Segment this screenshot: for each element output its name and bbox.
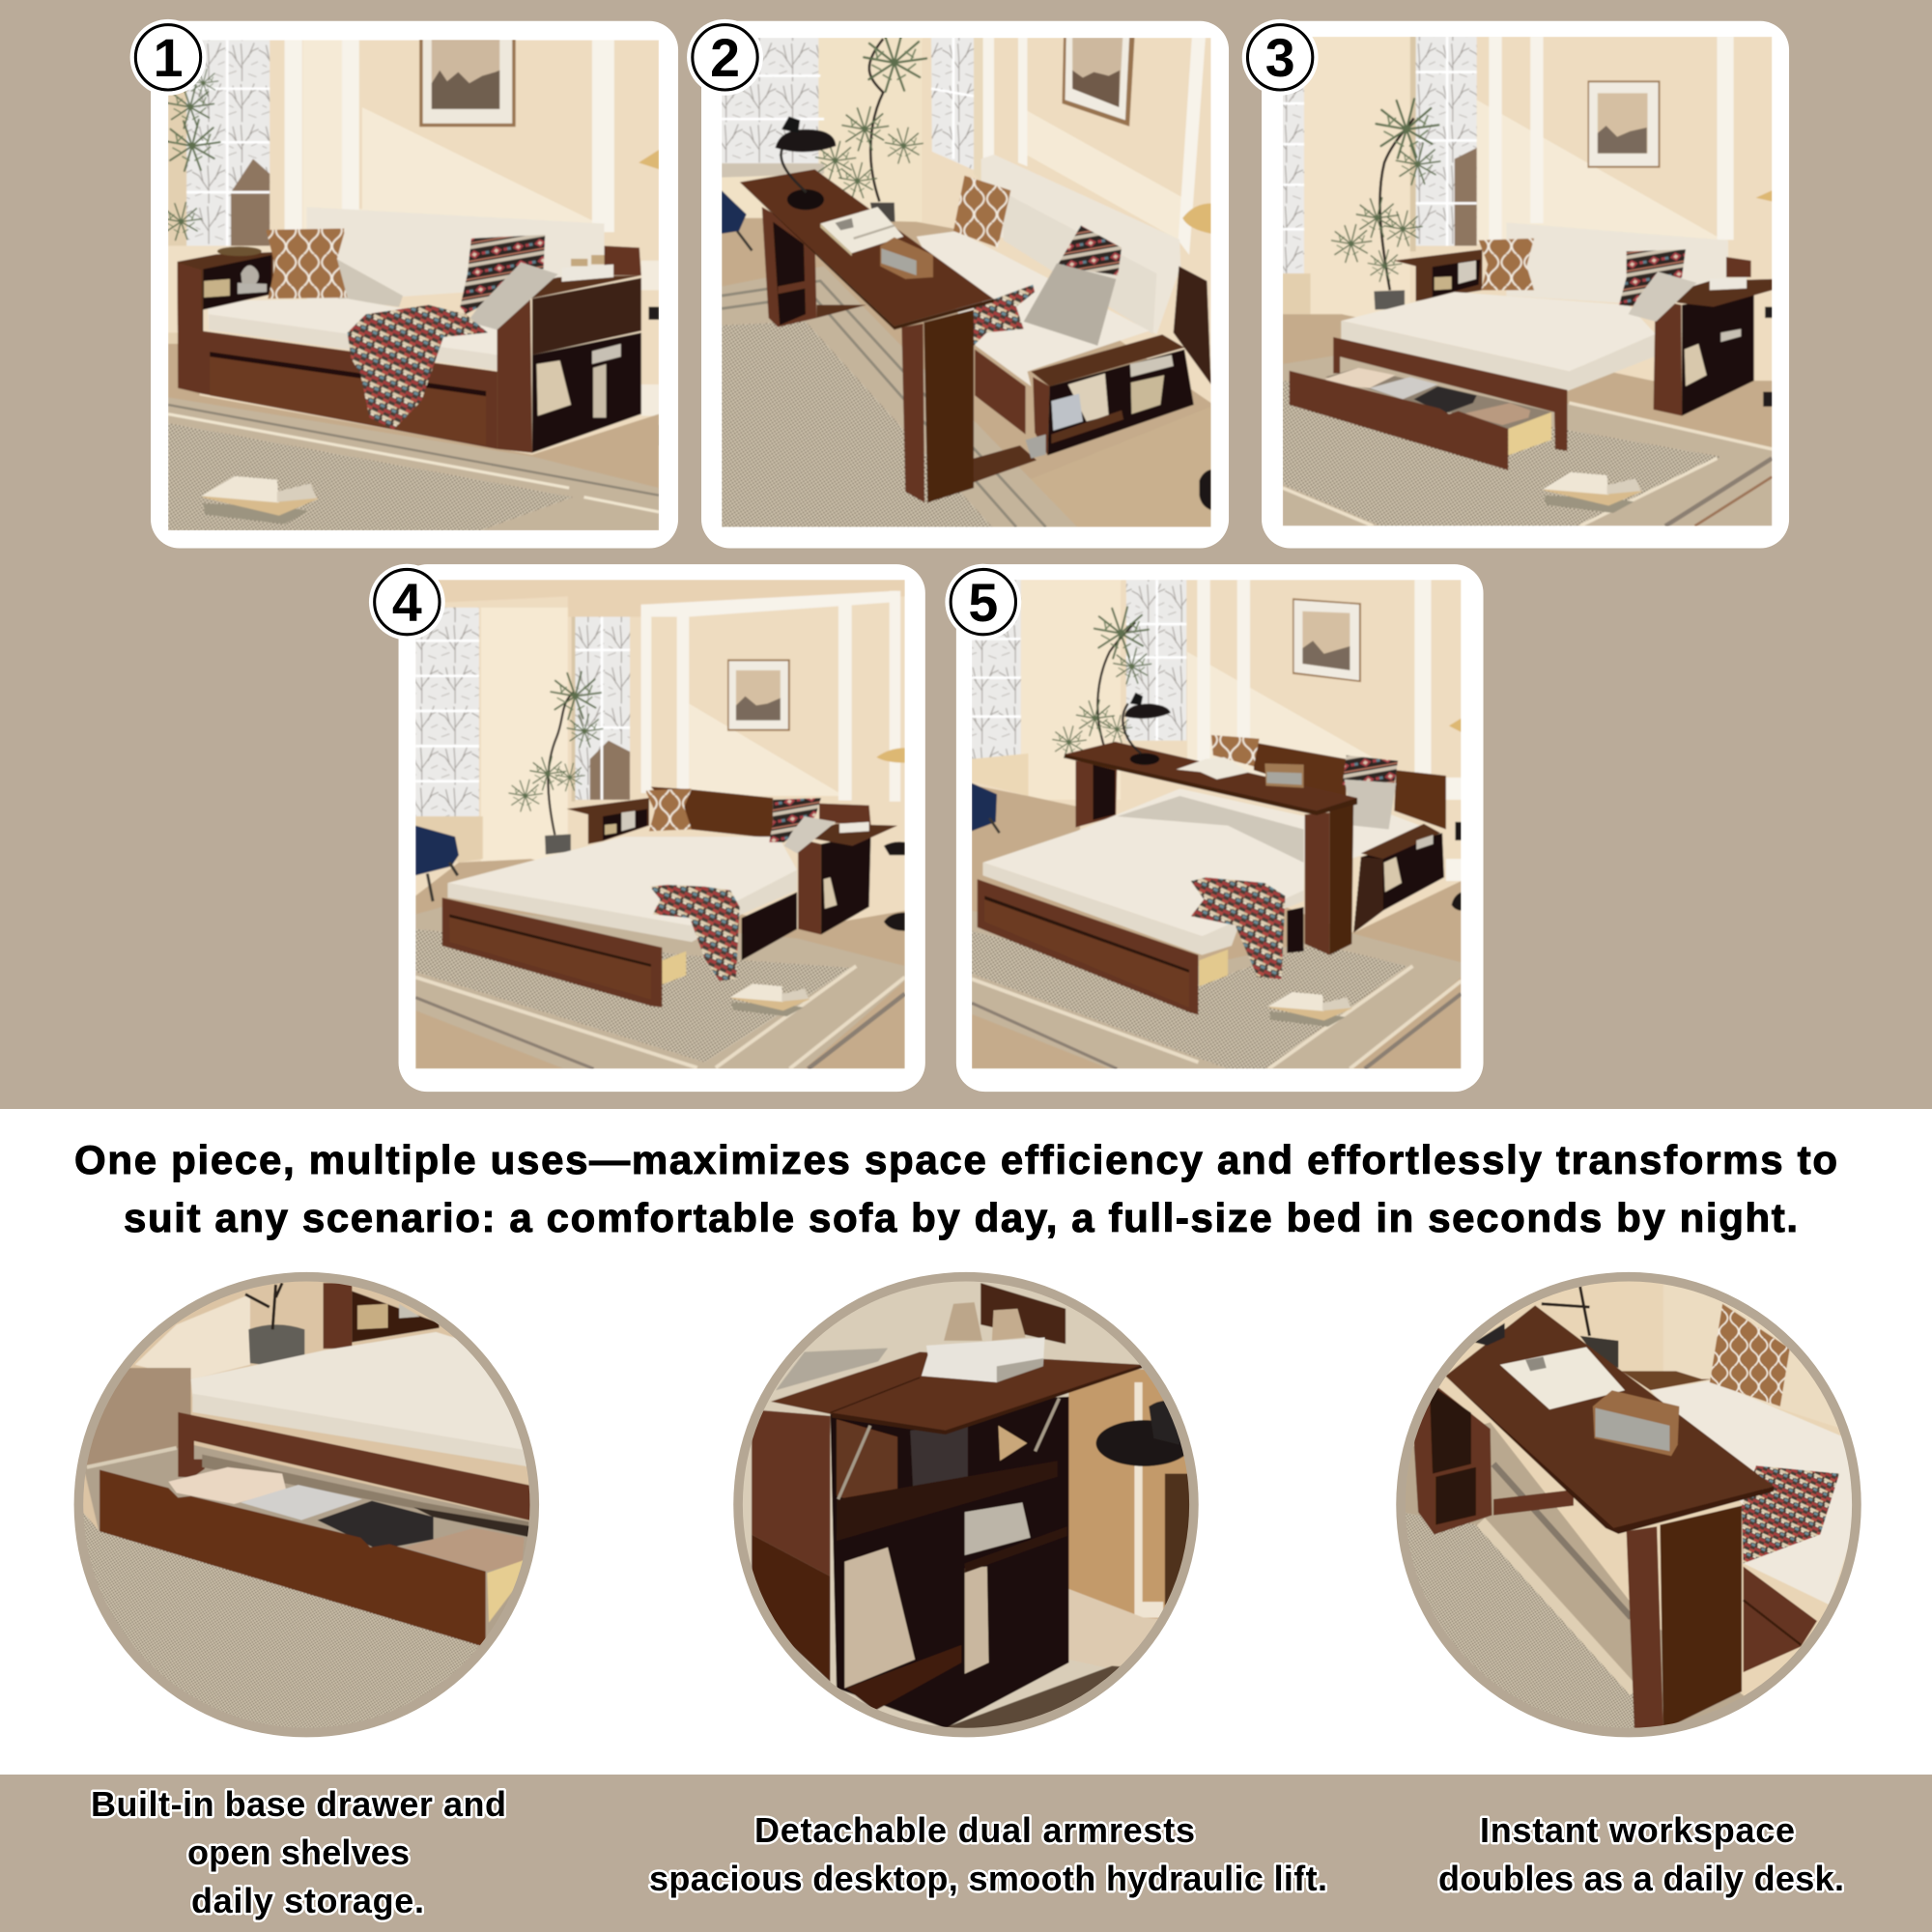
badge 5 xyxy=(945,564,1021,640)
floor and rug xyxy=(722,217,1211,479)
mattress xyxy=(447,837,797,933)
throw xyxy=(650,885,740,980)
desktop xyxy=(1445,1305,1774,1530)
panel 5 white card xyxy=(956,564,1484,1092)
desk rear leg xyxy=(762,207,816,327)
wall moulding xyxy=(641,591,900,802)
circle detail 3: desk xyxy=(1394,1272,1865,1743)
panel 2: sofa with desk xyxy=(701,21,1229,548)
radio xyxy=(880,238,933,279)
desktop xyxy=(771,1351,1143,1434)
blue chair xyxy=(415,826,459,901)
floor and rug xyxy=(415,859,905,1068)
panel 2 white card xyxy=(701,21,1229,548)
panel 1 room scene xyxy=(161,37,659,530)
front rail and drawer xyxy=(201,330,497,449)
inner panel and items xyxy=(837,1419,1067,1711)
desk lamp xyxy=(1122,693,1171,765)
under-desk dark xyxy=(1287,907,1304,953)
mattress xyxy=(982,788,1305,936)
wall art xyxy=(727,659,790,731)
circle detail 2: armrest lift xyxy=(731,1272,1202,1743)
panel 5 room scene xyxy=(972,580,1462,1068)
caption 3: doubles as a daily desk. xyxy=(1438,1859,1844,1898)
drawer scene xyxy=(74,1272,542,1743)
right shelf xyxy=(1353,824,1444,933)
desk rear leg xyxy=(1075,761,1117,828)
cabinet body xyxy=(830,1397,1068,1728)
wood side xyxy=(752,1409,830,1682)
sofa seat xyxy=(208,298,498,355)
drawer side xyxy=(975,350,1026,435)
sofa seat xyxy=(917,231,1150,386)
back wood panels xyxy=(1254,743,1347,800)
caption 3: Instant workspace xyxy=(1480,1810,1795,1850)
badge 3: 3 xyxy=(1265,28,1295,88)
bed rail xyxy=(178,1412,532,1521)
drawer front xyxy=(99,1470,486,1647)
caption 1: daily storage. xyxy=(191,1881,424,1920)
plant xyxy=(161,69,220,240)
badge 2: 2 xyxy=(710,28,740,88)
headline xyxy=(74,1137,1837,1240)
left shelf xyxy=(567,798,649,844)
under-bed dark xyxy=(742,893,797,960)
caption 1: Built-in base drawer and xyxy=(91,1784,506,1824)
panel 4: full bed xyxy=(399,564,925,1092)
right unit xyxy=(1654,257,1772,415)
badge 1: 1 xyxy=(154,28,183,88)
plant pot xyxy=(245,1283,304,1366)
sofa back xyxy=(1506,222,1728,303)
left arm shelf xyxy=(178,246,273,394)
desk lamp xyxy=(776,117,836,210)
throw xyxy=(1191,877,1285,979)
sofa backrest xyxy=(306,207,605,303)
left leg xyxy=(1413,1379,1492,1534)
blue chair xyxy=(972,783,1000,833)
throw xyxy=(1742,1465,1839,1563)
grey cushion xyxy=(776,1349,888,1390)
panel 3: bed with open drawer xyxy=(1262,21,1789,548)
wall art xyxy=(1062,38,1134,127)
floor and rug xyxy=(1283,313,1772,448)
foot rails xyxy=(974,445,1037,482)
rug xyxy=(1398,1422,1747,1736)
blue chair xyxy=(722,190,752,250)
mattress xyxy=(191,1332,532,1455)
floor and rug xyxy=(168,343,659,489)
caption 2: spacious desktop, smooth hydraulic lift. xyxy=(649,1859,1327,1898)
shelf post xyxy=(324,1283,440,1349)
lower frame xyxy=(1744,1567,1817,1672)
front arm shelf xyxy=(1031,334,1194,455)
panel 4 room scene xyxy=(415,580,905,1068)
panel 4 white card xyxy=(399,564,925,1092)
side table xyxy=(1096,1401,1192,1605)
caption 3 xyxy=(1438,1810,1844,1898)
pillows xyxy=(645,788,692,831)
desk front leg xyxy=(901,310,974,502)
headline: One piece, multiple uses—maximizes space efficiency and effortlessly transforms to xyxy=(74,1137,1837,1182)
badge 2 xyxy=(687,19,763,96)
front leg xyxy=(1627,1506,1742,1730)
desk book xyxy=(1177,757,1250,780)
caption 1 xyxy=(91,1784,506,1920)
plant xyxy=(1542,1287,1618,1368)
pillows and throw xyxy=(266,228,348,298)
panel 1: sofa mode xyxy=(151,21,678,548)
panel 5: bed with desk xyxy=(956,564,1484,1092)
bed frame with drawer xyxy=(442,897,686,1008)
sofa backrest xyxy=(981,155,1180,334)
desk top xyxy=(1065,742,1357,815)
panel 3 room scene xyxy=(1283,37,1772,526)
right arm xyxy=(497,245,641,453)
lift struts xyxy=(838,1399,1059,1499)
pillows xyxy=(1479,239,1534,290)
wall art xyxy=(1588,80,1661,168)
white middle section xyxy=(0,1109,1932,1775)
bed frame with drawer xyxy=(978,879,1228,1015)
back panels xyxy=(651,786,773,838)
right unit xyxy=(798,822,897,935)
armrest scene xyxy=(731,1272,1202,1743)
black dish xyxy=(1474,1323,1505,1346)
panel 2 room scene xyxy=(722,32,1211,527)
pillow xyxy=(1710,1304,1790,1406)
desk top xyxy=(740,169,993,326)
badge 1 xyxy=(130,19,206,96)
left shelf xyxy=(1394,249,1482,301)
badge 4 xyxy=(369,564,445,640)
bed frame rail xyxy=(1333,337,1567,451)
background band: bottom xyxy=(0,1775,1932,1932)
stacked books and glasses xyxy=(922,1302,1045,1382)
right armrest far xyxy=(1174,267,1211,384)
drawer contents xyxy=(168,1467,524,1623)
mattress xyxy=(1341,292,1656,372)
seat xyxy=(1651,1380,1861,1605)
open drawer xyxy=(1290,368,1552,470)
wall art xyxy=(419,37,516,127)
pillows xyxy=(1211,735,1260,766)
desk front leg xyxy=(1305,802,1353,955)
background band: top xyxy=(0,0,1932,1109)
badge 3 xyxy=(1242,19,1319,96)
caption 1: open shelves xyxy=(187,1833,410,1872)
headline: suit any scenario: a comfortable sofa by day, a full-size bed in seconds by night. xyxy=(124,1195,1798,1240)
badge 5: 5 xyxy=(968,573,998,633)
plant xyxy=(1053,607,1151,757)
book xyxy=(1500,1348,1625,1409)
radio xyxy=(1264,763,1304,788)
right seat xyxy=(1350,814,1420,859)
plant xyxy=(816,32,926,222)
plant xyxy=(1332,99,1440,310)
shag rug behind drawer xyxy=(202,1455,528,1531)
pillows xyxy=(953,176,1010,247)
radio xyxy=(1593,1390,1679,1456)
panel 1 white card xyxy=(151,21,678,548)
caption 2: Detachable dual armrests xyxy=(754,1810,1195,1850)
panel 3 white card xyxy=(1262,21,1789,548)
badge 4: 4 xyxy=(392,573,422,633)
caption 2 xyxy=(649,1810,1327,1898)
circle detail 1: base drawer xyxy=(74,1272,542,1743)
desk scene xyxy=(1394,1272,1865,1743)
floor and rug xyxy=(972,785,1462,1068)
plant xyxy=(509,671,603,854)
wall art xyxy=(1293,598,1361,682)
